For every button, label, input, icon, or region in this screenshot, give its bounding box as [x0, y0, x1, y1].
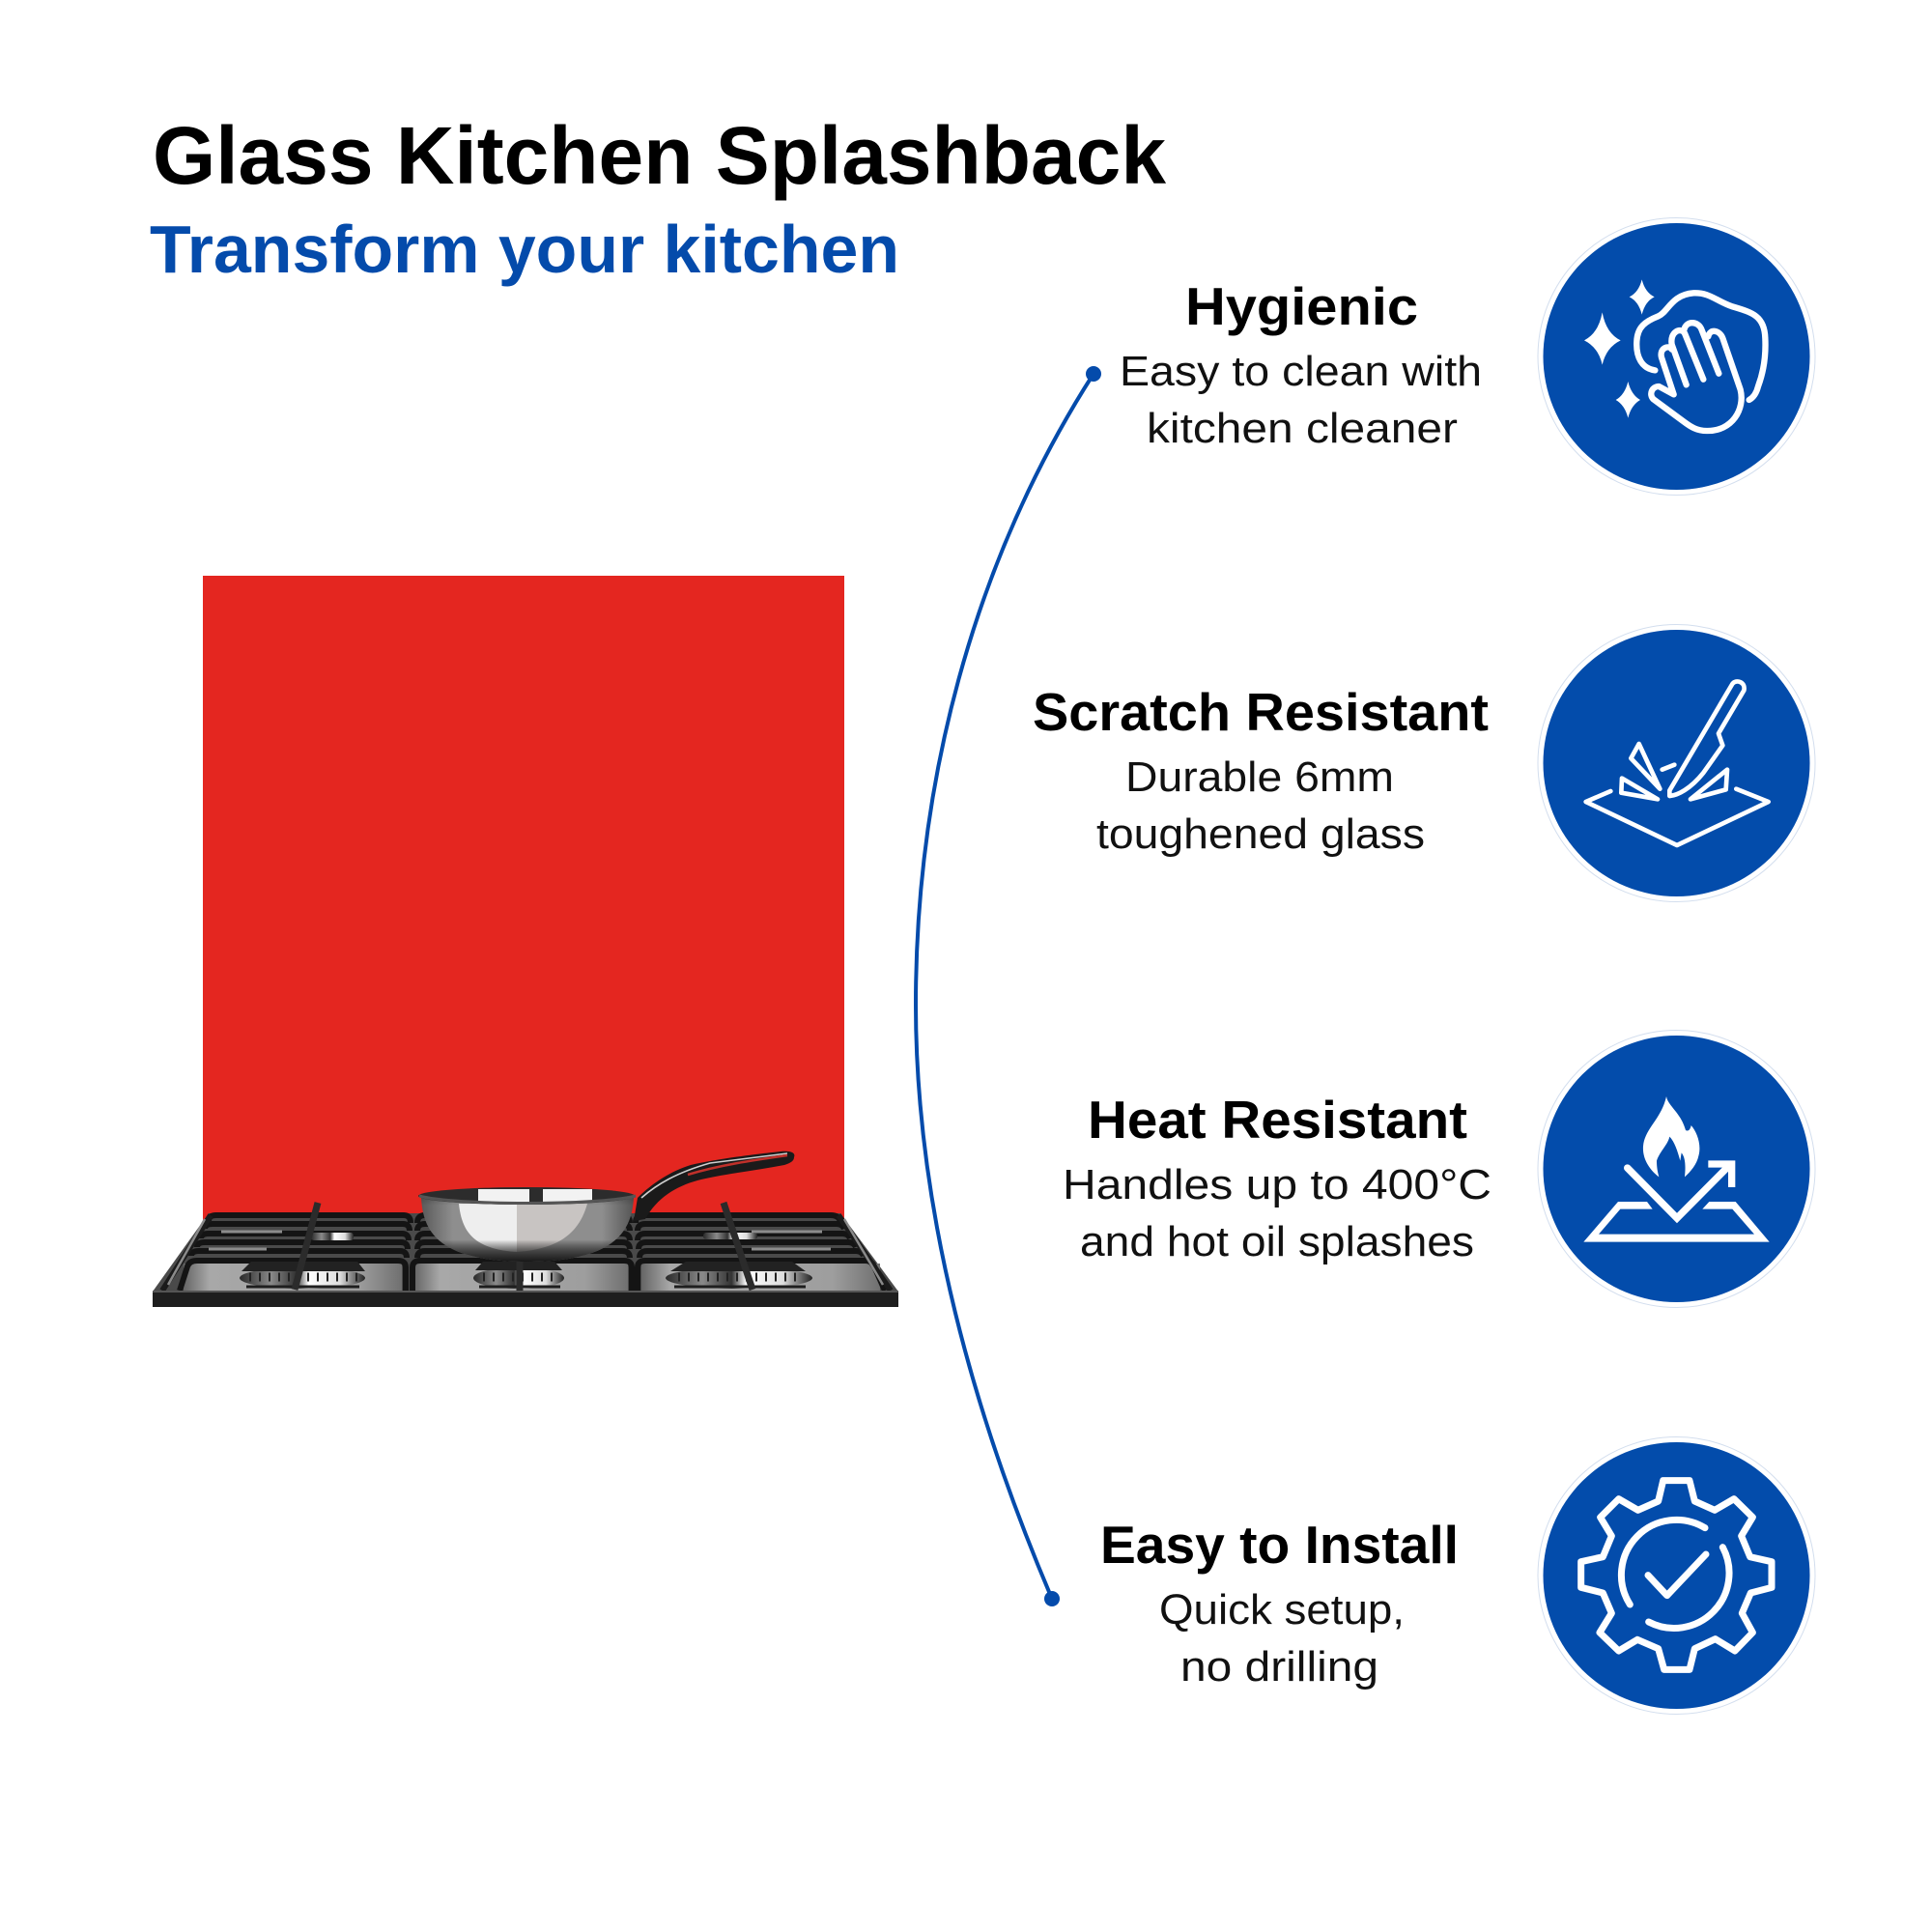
description line 2: and hot oil splashes — [1080, 1218, 1474, 1265]
heading: scratch resistant: Scratch Resistant — [1033, 682, 1489, 742]
description line 2: no drilling — [1180, 1643, 1378, 1690]
description line 1: Handles up to 400°C — [1063, 1161, 1492, 1208]
description line 1: Quick setup, — [1159, 1586, 1405, 1634]
front burners — [240, 1262, 812, 1289]
icon: gear with check mark — [1538, 1437, 1815, 1714]
pan reflections — [459, 1204, 517, 1252]
description line 2: toughened glass — [1096, 810, 1425, 858]
icon: hand wiping with cloth — [1538, 218, 1815, 495]
description line 1: Easy to clean with — [1120, 348, 1482, 395]
grate bars — [180, 1215, 885, 1291]
heading: heat resistant: Heat Resistant — [1088, 1090, 1467, 1150]
text block: hygienic — [1120, 276, 1482, 452]
text block: scratch resistant — [1033, 682, 1489, 858]
pan rim — [418, 1187, 635, 1205]
front band — [153, 1292, 898, 1307]
connector dot bottom — [1044, 1591, 1060, 1606]
rim highlight — [168, 1219, 883, 1285]
diagonal cross bars — [295, 1203, 753, 1291]
heading: hygienic: Hygienic — [1185, 276, 1418, 336]
icon: flame on surface with deflecting arrow — [1538, 1030, 1815, 1308]
grate rim — [162, 1215, 891, 1291]
text block: easy to install — [1100, 1515, 1459, 1690]
subtitle: Transform your kitchen — [150, 212, 899, 287]
heading: easy to install: Easy to Install — [1100, 1515, 1459, 1575]
red glass splashback panel — [203, 576, 844, 1221]
description line 2: kitchen cleaner — [1147, 405, 1458, 452]
rear burners — [311, 1233, 757, 1240]
frying pan — [418, 1151, 794, 1262]
title: Glass Kitchen Splashback — [153, 110, 1166, 201]
chrome burner trays — [184, 1264, 880, 1291]
grate highlights — [209, 1232, 831, 1249]
description line 1: Durable 6mm — [1125, 753, 1394, 801]
product image: red splashback with cooktop and pan — [153, 576, 898, 1307]
connector dot top — [1086, 366, 1101, 382]
pan handle — [634, 1151, 794, 1221]
icon: knife on glass surface — [1538, 624, 1815, 902]
gas cooktop — [153, 1203, 898, 1307]
connector curve — [916, 374, 1094, 1599]
text block: heat resistant — [1063, 1090, 1492, 1265]
pan body — [421, 1198, 634, 1262]
